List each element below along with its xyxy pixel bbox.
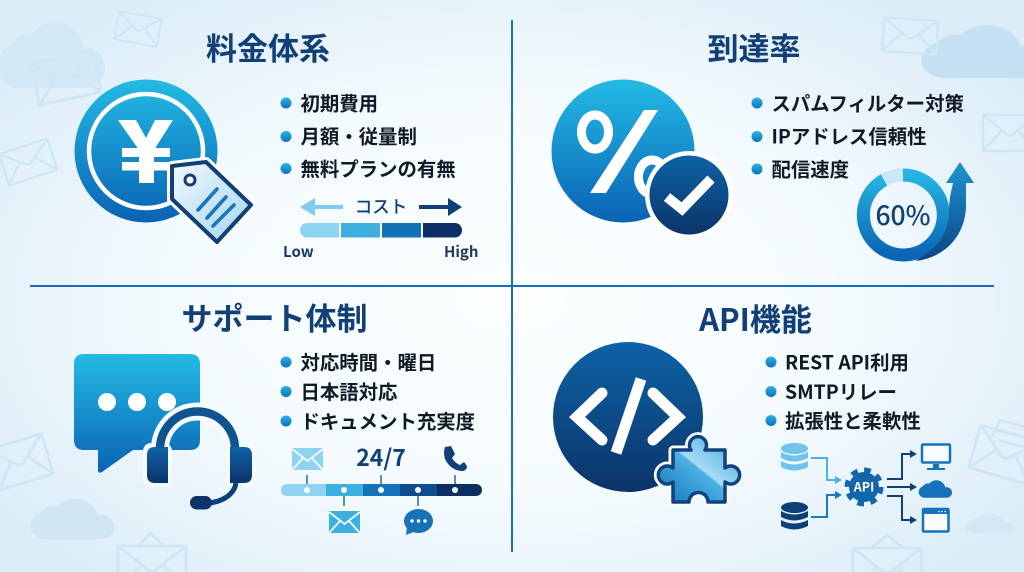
icon: cloud xyxy=(919,480,952,498)
bullet list: support: ドキュメント充実度 xyxy=(300,406,475,434)
icon: database light xyxy=(781,443,808,470)
bullet list: support: 日本語対応 xyxy=(300,376,398,405)
arrows out of API xyxy=(887,454,912,520)
bullet list: API: REST API利用 xyxy=(785,346,909,376)
bullet list: support xyxy=(280,346,475,434)
bullet list: deliverability: スパムフィルター対策 xyxy=(772,88,964,116)
bullet list: API: SMTPリレー xyxy=(785,376,897,405)
cost scale: High xyxy=(444,241,478,262)
bullet list: deliverability: 配信速度 xyxy=(772,154,849,182)
heading: API: API機能 xyxy=(698,295,812,340)
icon: database dark xyxy=(781,502,808,530)
icon: API gear xyxy=(847,470,881,504)
panel: pricing xyxy=(74,24,478,262)
icon: phone xyxy=(444,446,467,471)
bullet list: API xyxy=(766,346,921,434)
cost scale: コスト xyxy=(355,194,407,219)
chart: 60% donut with rising arrow xyxy=(863,162,974,261)
bullet list: support: 対応時間・曜日 xyxy=(300,346,436,376)
panel: deliverability xyxy=(552,24,974,261)
heading: deliverability: 到達率 xyxy=(708,24,800,69)
icon: API gear: API xyxy=(853,476,874,496)
bullet list: pricing: 月額・従量制 xyxy=(300,120,417,150)
icon: envelope bottom xyxy=(329,511,360,533)
icon: code circle with puzzle piece xyxy=(553,342,740,502)
bullet list: pricing: 無料プランの有無 xyxy=(300,153,456,182)
heading: support: サポート体制 xyxy=(182,294,368,339)
bullet list: API: 拡張性と柔軟性 xyxy=(785,405,921,434)
arrows into API xyxy=(811,458,838,517)
diagram: API integration xyxy=(781,443,952,532)
icon: chat bubble with headset xyxy=(74,354,256,510)
label: 24/7: 24/7 xyxy=(356,439,406,473)
cost scale xyxy=(283,194,478,262)
timeline: 24/7 channels xyxy=(281,439,482,535)
bullet list: pricing xyxy=(280,88,456,182)
icon: percent with check badge xyxy=(552,80,733,239)
icon: monitor xyxy=(922,444,950,470)
panel: API xyxy=(553,295,952,532)
icon: envelope top xyxy=(292,448,323,470)
bullet list: deliverability xyxy=(752,88,964,182)
icon: chat bubble small xyxy=(404,509,433,535)
panel: support xyxy=(74,294,482,535)
cost scale: Low xyxy=(283,241,314,262)
bullet list: pricing: 初期費用 xyxy=(300,88,378,116)
chart: 60% donut with rising arrow: 60% xyxy=(875,194,931,233)
bullet list: deliverability: IPアドレス信頼性 xyxy=(772,120,927,150)
icon: yen coin with price tag xyxy=(74,80,251,242)
heading: pricing: 料金体系 xyxy=(206,24,330,69)
icon: browser window xyxy=(923,509,948,532)
